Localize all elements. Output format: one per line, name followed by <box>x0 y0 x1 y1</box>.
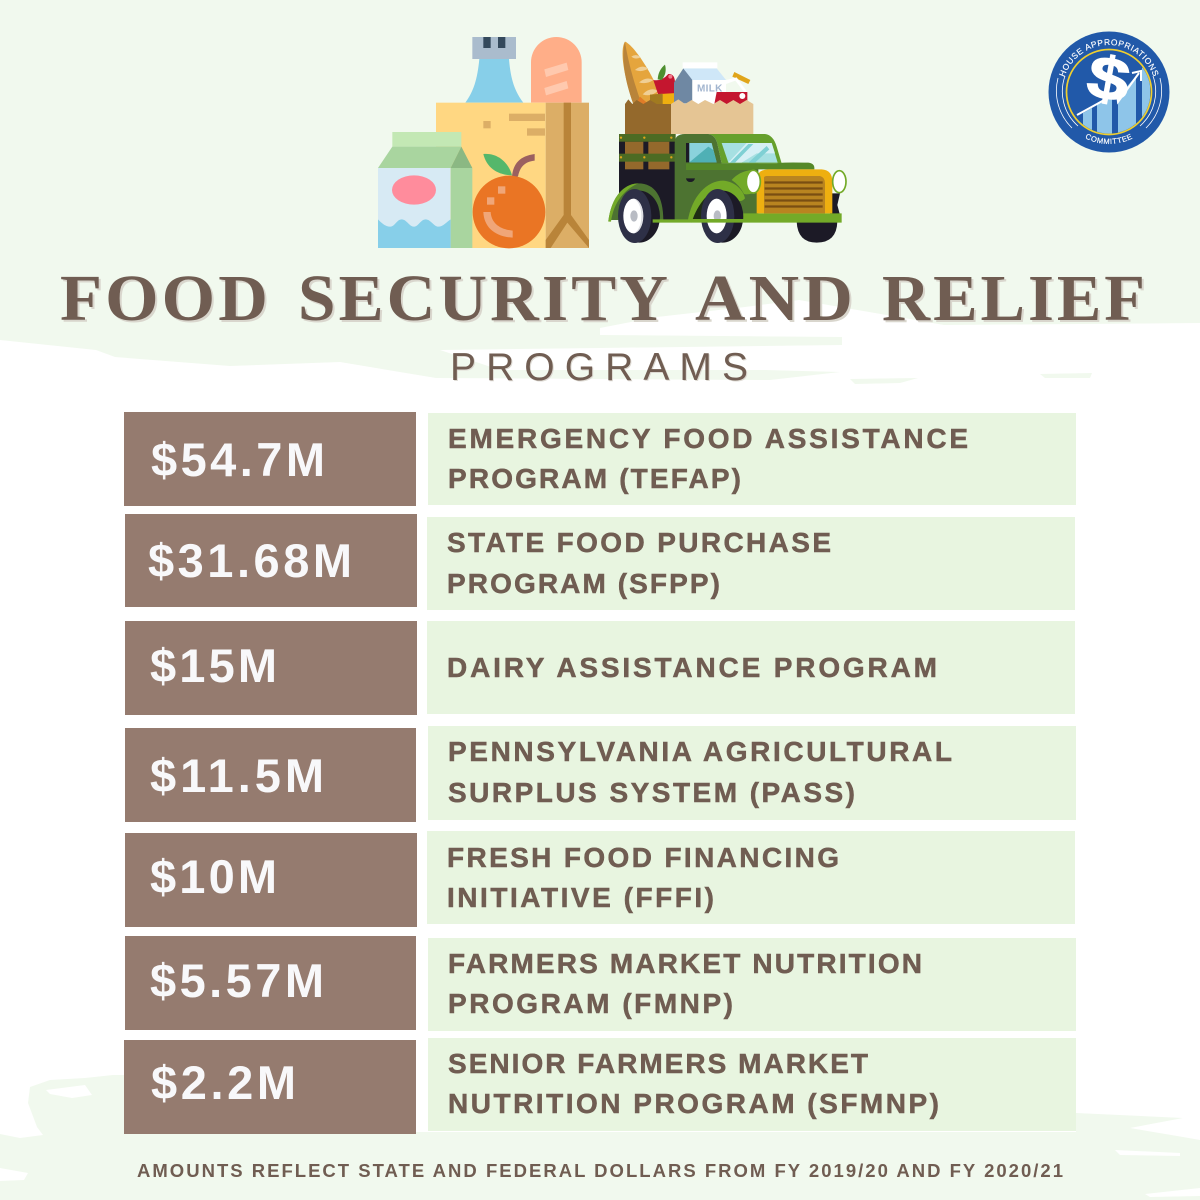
icon: paper bag <box>436 103 589 248</box>
row: FFFI: $10M <box>150 850 277 903</box>
icon: orange <box>473 154 545 248</box>
footnote: AMOUNTS REFLECT STATE AND FEDERAL DOLLARS FROM FY 2019/20 AND FY 2020/21 <box>137 1160 1063 1181</box>
row: FFFI <box>125 831 1075 927</box>
row: PASS: $11.5M <box>150 749 324 802</box>
row: TEFAP: $54.7M <box>151 433 325 486</box>
row: FMNP <box>125 936 1076 1031</box>
icon: front fender and wheel <box>688 170 753 243</box>
row: SFMNP: NUTRITION PROGRAM (SFMNP) <box>448 1088 939 1119</box>
row: Dairy <box>125 621 1075 715</box>
title: FOOD <box>62 264 273 337</box>
row: PASS <box>125 726 1076 822</box>
title: AND <box>697 264 858 337</box>
icon: running board <box>653 213 842 223</box>
subtitle: PROGRAMS <box>450 346 748 389</box>
row: Dairy: $15M <box>150 639 277 692</box>
row: SFPP: STATE FOOD PURCHASE <box>447 527 831 558</box>
title: SECURITY <box>300 264 673 337</box>
title: AND <box>695 262 856 335</box>
title: FOOD <box>60 262 271 335</box>
icon: truck far wheel <box>797 193 840 243</box>
row: FFFI: INITIATIVE (FFFI) <box>447 882 714 913</box>
icon: bread loaf <box>531 37 582 103</box>
row: PASS: PENNSYLVANIA AGRICULTURAL <box>448 736 952 767</box>
icon: rear fender and wheel <box>608 183 663 243</box>
icon: groceries: MILK <box>697 84 723 95</box>
row: SFMNP <box>124 1038 1076 1134</box>
seal bars <box>1083 68 1150 134</box>
title: RELIEF <box>884 264 1150 337</box>
title: SECURITY <box>298 262 671 335</box>
row: FMNP: PROGRAM (FMNP) <box>448 988 733 1019</box>
icon: groceries <box>623 42 750 104</box>
row: TEFAP: PROGRAM (TEFAP) <box>448 463 741 494</box>
row: TEFAP: EMERGENCY FOOD ASSISTANCE <box>448 423 968 454</box>
title <box>60 262 1150 337</box>
row: SFMNP: SENIOR FARMERS MARKET <box>448 1048 868 1079</box>
icon: truck cab <box>675 134 814 222</box>
background wash: top <box>0 0 1200 384</box>
row: SFPP <box>125 514 1075 610</box>
logo: House Appropriations Committee seal <box>1048 32 1170 152</box>
row: PASS: SURPLUS SYSTEM (PASS) <box>448 777 855 808</box>
icon: milk carton <box>378 132 472 248</box>
icon: cardboard box <box>625 99 753 134</box>
seal dollar sign: $ <box>1082 43 1135 116</box>
row: TEFAP <box>124 412 1076 506</box>
row: FFFI: FRESH FOOD FINANCING <box>447 842 839 873</box>
icon: grille <box>757 169 832 213</box>
row: SFMNP: $2.2M <box>151 1056 296 1109</box>
background wash: bottom <box>0 1075 1200 1200</box>
icon: water bottle <box>465 37 523 103</box>
title: RELIEF <box>882 262 1148 335</box>
illustration: green truck with groceries <box>608 42 846 243</box>
row: SFPP: $31.68M <box>148 534 352 587</box>
seal arrow <box>1077 71 1141 115</box>
subtitle: PROGRAMS <box>451 347 749 390</box>
row: SFPP: PROGRAM (SFPP) <box>447 568 720 599</box>
row: FMNP: $5.57M <box>150 954 324 1007</box>
white wash flecks <box>0 1085 1200 1197</box>
row: Dairy: DAIRY ASSISTANCE PROGRAM <box>447 652 937 683</box>
seal text: committee: COMMITTEE <box>1086 134 1132 144</box>
illustration: grocery bag <box>378 37 589 248</box>
row: FMNP: FARMERS MARKET NUTRITION <box>448 948 922 979</box>
icon: headlights <box>746 170 846 193</box>
seal text: HOUSE APPROPRIATIONS <box>1059 39 1158 77</box>
icon: truck bed <box>619 134 676 221</box>
